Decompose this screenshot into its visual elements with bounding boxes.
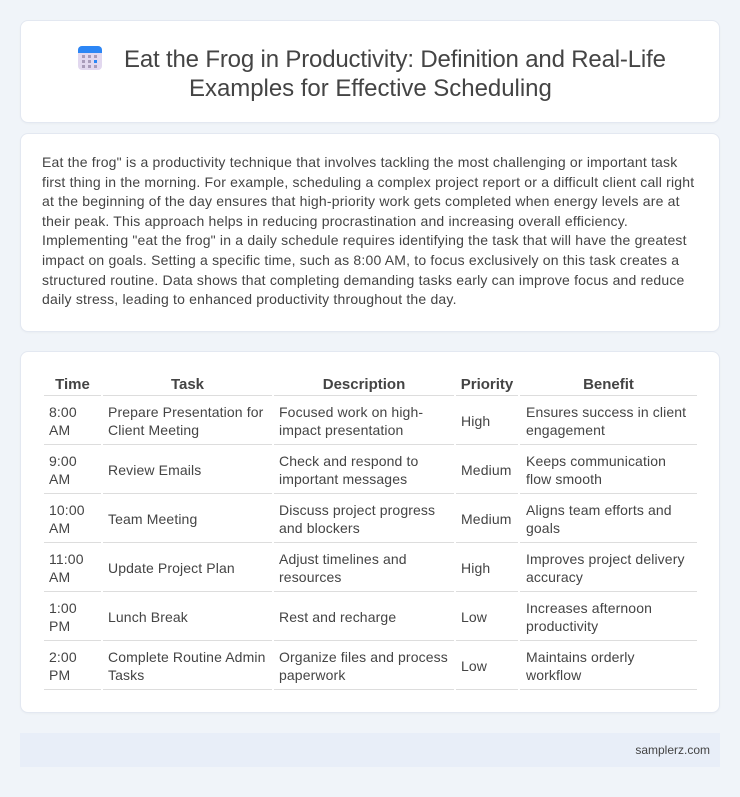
table: daily schedule: 1:00 [49,600,77,616]
table: daily schedule: 9:00 [49,453,77,469]
table: daily schedule: AM [49,569,70,585]
table: daily schedule: Update Project Plan [108,560,235,576]
table: daily schedule: Ensures success in client [526,404,686,420]
footer [20,733,720,767]
table: daily schedule: Time [55,376,90,392]
title [124,46,666,102]
table: daily schedule: 10:00 [49,502,85,518]
title: Examples for Effective Scheduling [189,75,552,102]
text block: introduction [42,154,694,307]
table: daily schedule: 11:00 [49,551,84,567]
table: daily schedule: Benefit [583,376,634,392]
table: daily schedule: Rest and recharge [279,609,396,625]
table: daily schedule: accuracy [526,569,583,585]
table: daily schedule: Description [323,376,405,392]
table: daily schedule: Client Meeting [108,422,199,438]
table: daily schedule: PM [49,618,70,634]
table: daily schedule: impact presentation [279,422,403,438]
table: daily schedule: Medium [461,511,512,527]
table: daily schedule: 2:00 [49,649,77,665]
table: daily schedule: Focused work on high- [279,404,423,420]
table: daily schedule: Low [461,609,487,625]
text block: introduction: Eat the frog" is a productivity technique that involves tackling the most challenging or important task [42,154,677,170]
table: daily schedule: Medium [461,462,512,478]
text block: introduction: at the beginning of the day ensures that high-priority work gets completed when energy levels are at [42,193,680,209]
table: daily schedule: PM [49,667,70,683]
text block: introduction: first thing in the morning. For example, scheduling a complex project report or a difficult client call right [42,174,694,190]
table: daily schedule: High [461,560,490,576]
table: daily schedule: High [461,413,490,429]
table: daily schedule: workflow [526,667,581,683]
text block: introduction: their peak. This approach helps in reducing procrastination and increasing overall efficiency. [42,213,628,229]
text block: introduction: impact on goals. Setting a specific time, such as 8:00 AM, to focus exclusively on this task creates a [42,252,679,268]
table: daily schedule: Priority [461,376,513,392]
icon: calendar [78,46,102,70]
table: daily schedule: flow smooth [526,471,602,487]
text block: introduction: Implementing "eat the frog" in a daily schedule requires identifying the task that will have the greatest [42,232,687,248]
table: daily schedule: Maintains orderly [526,649,635,665]
table: daily schedule: Adjust timelines and [279,551,407,567]
table: daily schedule: Prepare Presentation for [108,404,263,420]
table: daily schedule: Low [461,658,487,674]
table: daily schedule: Task [171,376,204,392]
table: daily schedule: 8:00 [49,404,77,420]
table: daily schedule: Review Emails [108,462,201,478]
table: daily schedule: paperwork [279,667,345,683]
footer credit: samplerz.com [635,743,710,757]
table: daily schedule: and blockers [279,520,360,536]
panel: introduction [20,133,720,332]
table: daily schedule: resources [279,569,342,585]
table: daily schedule: Organize files and process [279,649,448,665]
table: daily schedule: Lunch Break [108,609,188,625]
table: daily schedule: Tasks [108,667,144,683]
table: daily schedule: AM [49,422,70,438]
title: Eat the Frog in Productivity: Definition and Real-Life [124,46,666,73]
table: daily schedule [44,376,697,690]
text block: introduction: structured routine. Data shows that completing demanding tasks early can improve focus and reduce [42,272,685,288]
table: daily schedule: AM [49,520,70,536]
table: daily schedule: productivity [526,618,598,634]
table: daily schedule: important messages [279,471,407,487]
table: daily schedule: Keeps communication [526,453,666,469]
table: daily schedule: engagement [526,422,605,438]
table: daily schedule: Improves project delivery [526,551,685,567]
panel: title header [20,20,720,123]
panel: schedule table [20,351,720,713]
table: daily schedule: Increases afternoon [526,600,652,616]
table: daily schedule: goals [526,520,560,536]
table: daily schedule: Team Meeting [108,511,197,527]
table: daily schedule: Aligns team efforts and [526,502,672,518]
table: daily schedule: Discuss project progress [279,502,435,518]
table: daily schedule: AM [49,471,70,487]
text block: introduction: daily stress, leading to enhanced productivity throughout the day. [42,291,457,307]
table: daily schedule: Complete Routine Admin [108,649,266,665]
table: daily schedule: Check and respond to [279,453,418,469]
